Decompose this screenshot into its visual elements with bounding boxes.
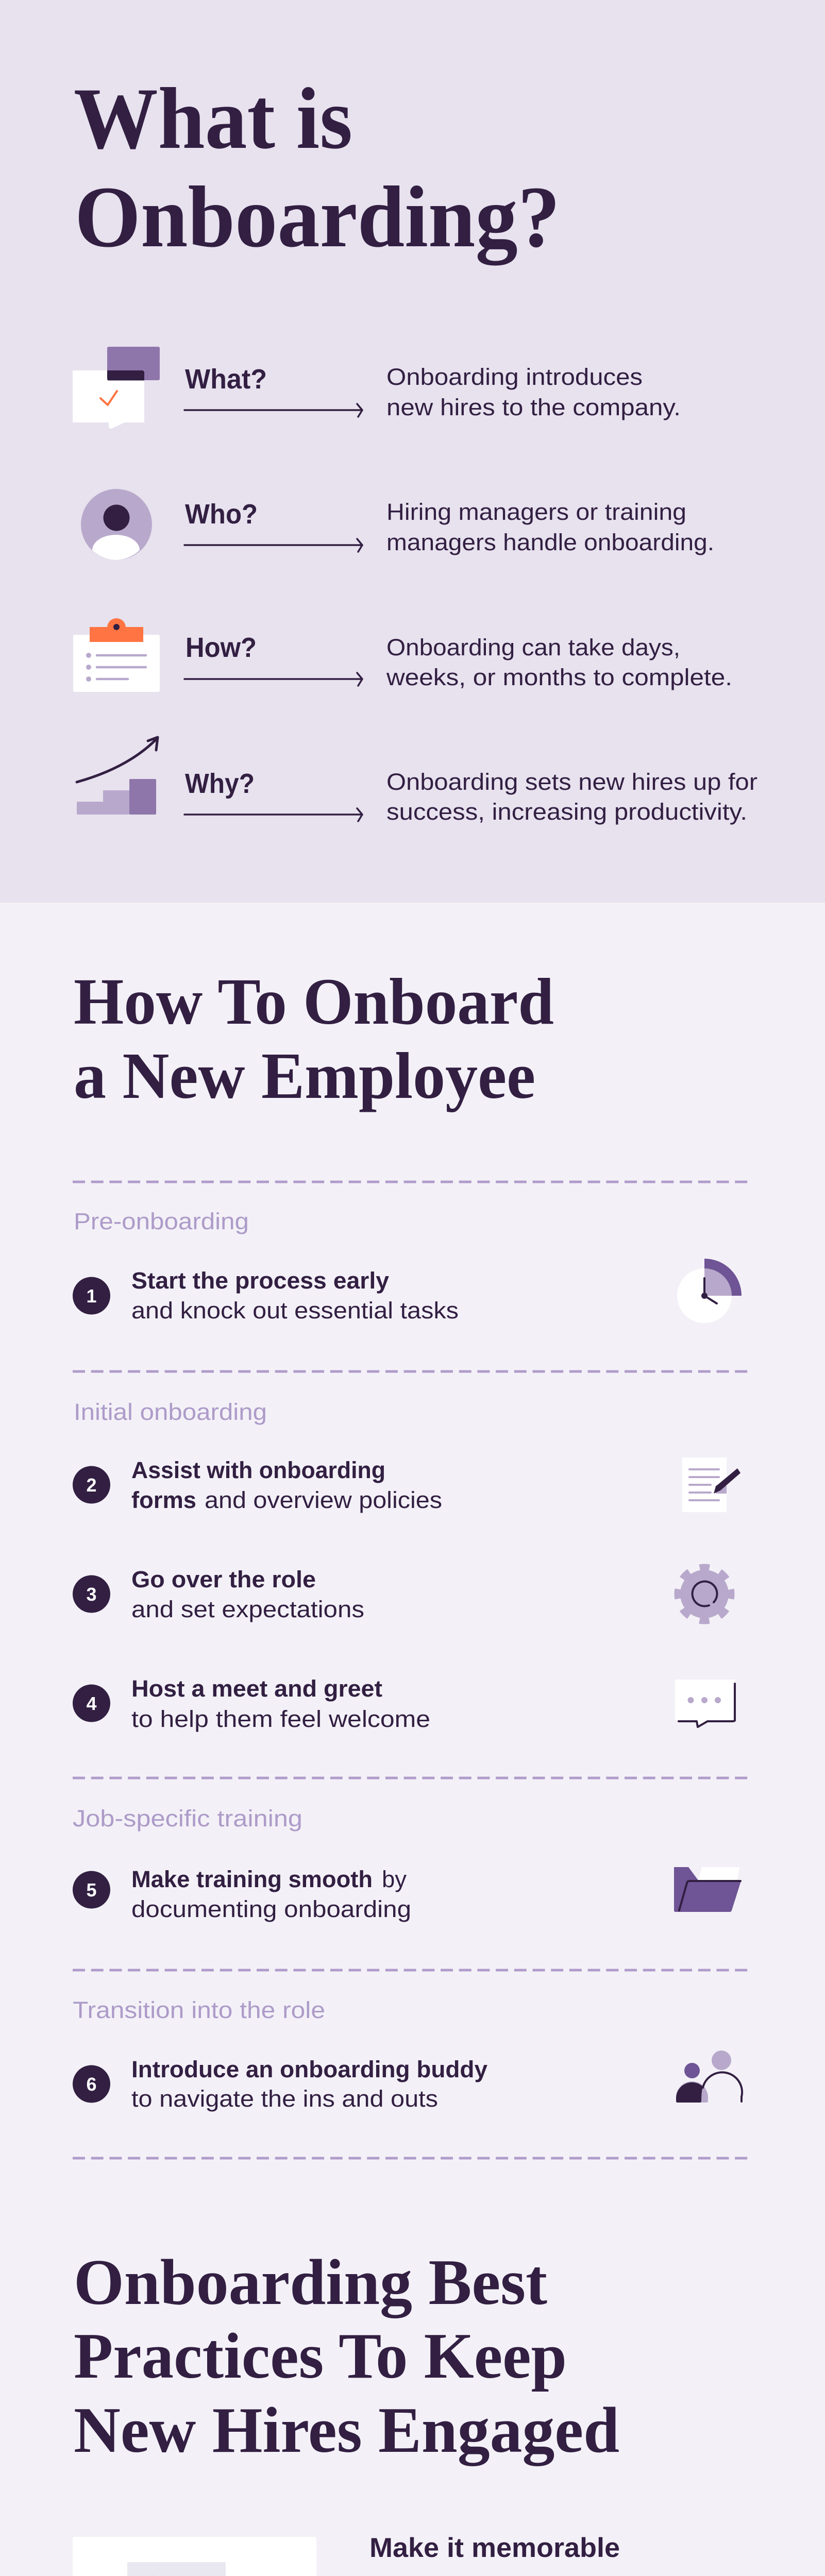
- row: who: [81, 489, 714, 560]
- number badge 4: [73, 1685, 110, 1722]
- illustration: envelope and coffee: [73, 2537, 316, 2576]
- heading: best practices: Onboarding Best: [74, 2247, 547, 2318]
- arrow: [184, 539, 362, 552]
- step 2: [73, 1457, 740, 1513]
- row: how: [73, 618, 732, 692]
- number badge 5: [73, 1871, 110, 1908]
- text: step 1: and knock out essential tasks: [131, 1297, 459, 1324]
- heading: how to onboard: a New Employee: [74, 1039, 535, 1112]
- icon: folder: [674, 1867, 741, 1912]
- row: what: [73, 347, 681, 429]
- icon: clipboard: [73, 618, 160, 692]
- text: step 5: documenting onboarding: [131, 1896, 411, 1922]
- title: [74, 70, 560, 265]
- text: step 6: to navigate the ins and outs: [131, 2086, 438, 2112]
- heading: how to onboard: [74, 965, 554, 1112]
- row: why: [77, 737, 757, 825]
- text: who description: Hiring managers or training: [386, 499, 686, 525]
- label: who: Who?: [185, 499, 258, 530]
- icon: document and pen: [682, 1458, 740, 1512]
- text: how description: weeks, or months to complete.: [386, 664, 732, 690]
- icon: clock: [677, 1259, 742, 1323]
- number badge 6: [73, 2065, 110, 2103]
- number badge 3: [73, 1575, 110, 1613]
- text: step 5: by: [382, 1866, 407, 1892]
- text: step 1: [131, 1267, 459, 1324]
- text: step 4: Host a meet and greet: [131, 1675, 382, 1702]
- text: step 2: Assist with onboarding: [131, 1457, 385, 1483]
- label: why: Why?: [185, 768, 255, 799]
- title: Onboarding?: [75, 168, 560, 265]
- text: step 5: Make training smooth: [131, 1866, 373, 1892]
- text: step 3: and set expectations: [131, 1596, 364, 1622]
- panel: what is onboarding: [0, 0, 825, 903]
- text: step 2: [131, 1457, 442, 1513]
- label: transition into the role: Transition into the role: [73, 1997, 325, 2023]
- icon: speech bubble: [675, 1680, 735, 1727]
- text: step 5: [131, 1866, 411, 1922]
- arrow: [184, 673, 362, 686]
- arrow: [184, 404, 362, 417]
- text: what description: new hires to the company.: [386, 394, 681, 420]
- number badge 1: [73, 1277, 110, 1315]
- text: step 3: Go over the role: [131, 1566, 316, 1592]
- heading: Make it memorable: [369, 2533, 620, 2563]
- icon: chat bubble with check: [73, 347, 160, 429]
- heading: best practices: New Hires Engaged: [74, 2395, 619, 2466]
- icon: two people: [676, 2050, 742, 2103]
- number badge 2: [73, 1466, 110, 1503]
- text: how description: [386, 634, 732, 690]
- step 1: [73, 1259, 742, 1324]
- text: step 2: and overview policies: [205, 1487, 442, 1513]
- text: step 4: to help them feel welcome: [131, 1706, 430, 1732]
- icon: gear: [678, 1567, 731, 1621]
- text: step 1: Start the process early: [131, 1267, 389, 1294]
- icon: rising steps with arrow: [77, 737, 158, 815]
- step 4: [73, 1675, 735, 1732]
- number badge 2: 2: [86, 1475, 97, 1496]
- number badge 1: 1: [86, 1285, 97, 1307]
- step 6: [73, 2050, 742, 2112]
- number badge 6: 6: [86, 2074, 97, 2095]
- text: why description: success, increasing productivity.: [386, 799, 747, 825]
- practice: make it memorable: [73, 2533, 649, 2576]
- text: why description: Onboarding sets new hires up for: [386, 769, 757, 795]
- number badge 5: 5: [86, 1879, 97, 1901]
- text: who description: [386, 499, 714, 555]
- number badge 3: 3: [86, 1584, 97, 1605]
- icon: person avatar: [81, 489, 152, 560]
- label: how: How?: [186, 632, 257, 663]
- arrow: [184, 808, 362, 821]
- text: step 6: Introduce an onboarding buddy: [131, 2056, 487, 2082]
- number badge 4: 4: [86, 1693, 97, 1714]
- text: who description: managers handle onboarding.: [386, 529, 714, 555]
- label: pre-onboarding: Pre-onboarding: [74, 1208, 249, 1234]
- text: what description: Onboarding introduces: [386, 364, 643, 390]
- text: what description: [386, 364, 681, 420]
- label: what: What?: [185, 364, 267, 395]
- step 5: [73, 1866, 741, 1922]
- heading: best practices: Practices To Keep: [74, 2320, 567, 2392]
- text: why description: [386, 769, 757, 825]
- heading: best practices: [74, 2247, 619, 2466]
- text: step 4: [131, 1675, 430, 1732]
- text: step 3: [131, 1566, 364, 1622]
- step 3: [73, 1566, 731, 1622]
- title: What is: [74, 70, 352, 167]
- text: step 6: [131, 2056, 487, 2112]
- text: how description: Onboarding can take days,: [386, 634, 680, 660]
- label: job-specific training: Job-specific training: [73, 1805, 302, 1832]
- heading: how to onboard: How To Onboard: [74, 965, 554, 1038]
- label: initial onboarding: Initial onboarding: [74, 1399, 267, 1425]
- text: step 2: forms: [131, 1487, 196, 1513]
